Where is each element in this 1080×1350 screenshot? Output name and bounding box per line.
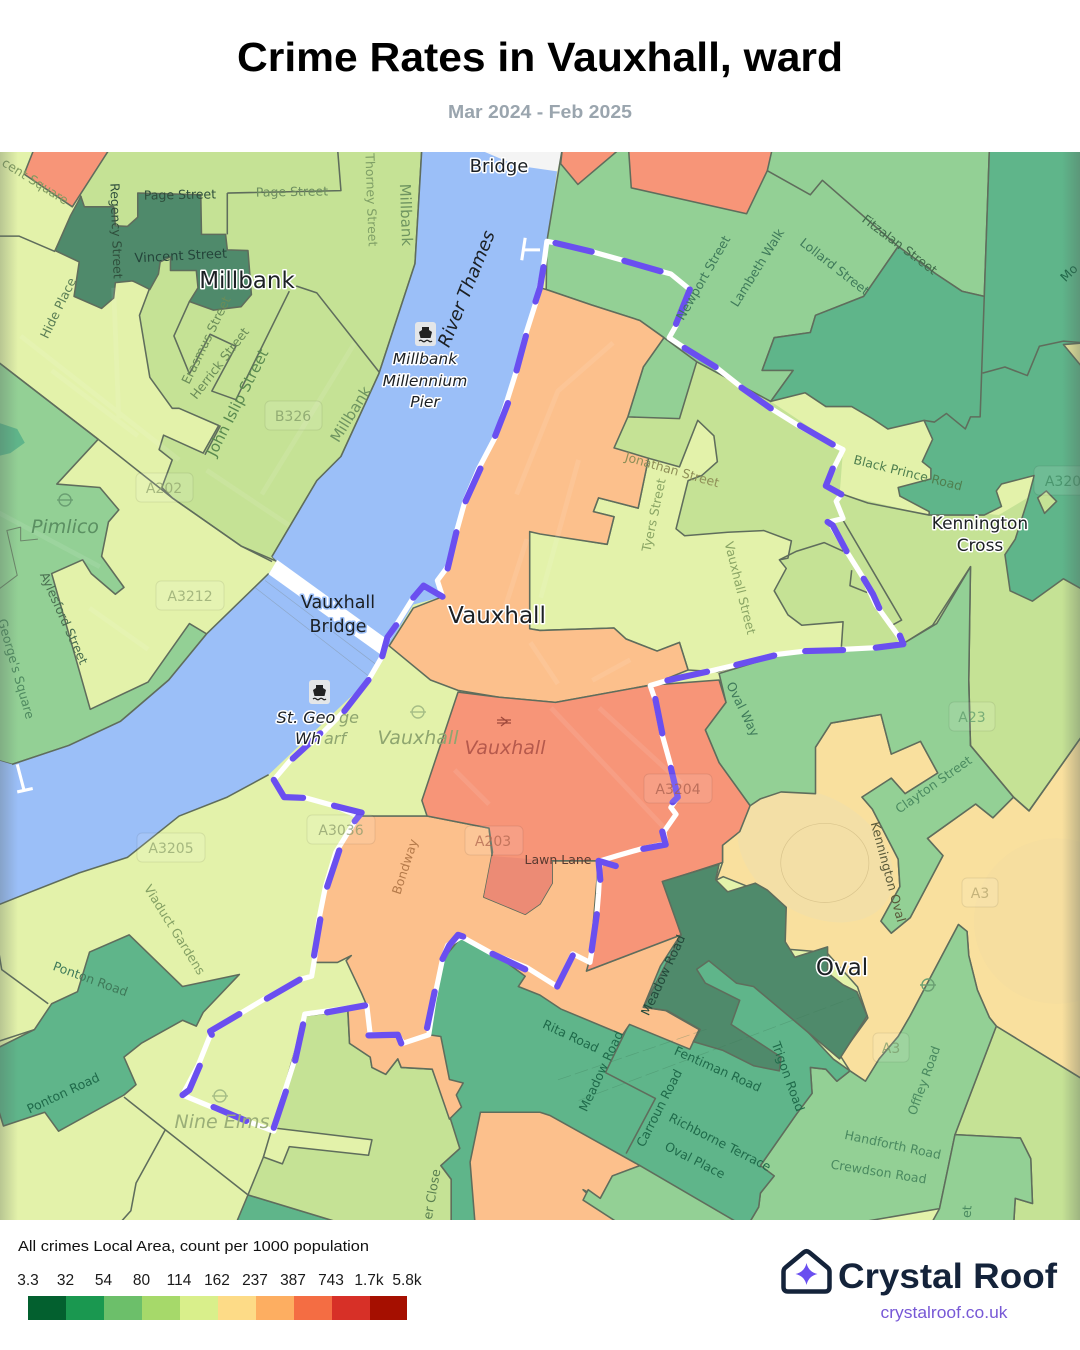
website url: crystalroof.co.uk <box>880 1304 1008 1322</box>
subtitle: date range: Mar 2024 - Feb 2025 <box>448 101 632 122</box>
logo: Crystal Roof <box>784 1251 1057 1322</box>
map zones <box>0 148 1080 1226</box>
zone: small cream patch <box>1062 343 1080 366</box>
ward boundary white casing <box>183 241 903 1131</box>
label: Kennington Cross <box>932 514 1028 556</box>
road sign: A3036 <box>307 815 375 844</box>
icon: house with star <box>784 1251 830 1292</box>
label: Vauxhall Bridge: Vauxhall <box>301 593 375 613</box>
label: Jonathan Street: Jonathan Street <box>622 449 721 490</box>
label: Tyers Street: Tyers Street <box>638 477 669 554</box>
label: Millbank district: Millbank <box>199 268 295 294</box>
map background: base crime band <box>0 152 1080 1220</box>
zone: Lambeth top salmon large <box>629 148 772 214</box>
zone: lower left green <box>583 1166 744 1226</box>
Kia Oval pitch ellipse <box>738 792 786 906</box>
west boundaries <box>0 939 248 1226</box>
label: Black Prince Road: Black Prince Road <box>852 452 964 493</box>
icon: tube Vauxhall <box>410 706 426 718</box>
road sign: A203: A203 <box>475 834 511 850</box>
road sign: A203 <box>465 826 523 855</box>
label: Close: er Close <box>420 1168 443 1221</box>
zone: Nine Elms yellow strip <box>263 1128 372 1164</box>
label: Offley Road: Offley Road <box>904 1044 943 1117</box>
road sign: B326: B326 <box>275 409 311 425</box>
legend colour bar <box>28 1296 407 1320</box>
road sign: A320 <box>1034 466 1080 495</box>
zone: small light green patch <box>1038 491 1057 513</box>
icon: tube Pimlico <box>57 494 73 506</box>
legend scale labels: 5.8k <box>392 1272 422 1289</box>
area labels <box>31 516 546 1133</box>
zone: dark salmon pocket <box>484 856 552 914</box>
label: Crewdson Road: Crewdson Road <box>830 1157 928 1187</box>
label: Vincent Square: cent Square <box>0 155 72 208</box>
zone: Vauxhall north orange <box>389 288 688 702</box>
zone: Pimlico teal blob <box>0 422 25 457</box>
zone: Vauxhall south teal <box>431 940 850 1220</box>
zone: west teal, Ponton Road <box>0 935 239 1131</box>
label: John Islip Street: John Islip Street <box>202 346 272 460</box>
panel: choropleth map <box>0 148 1080 1226</box>
legend scale labels: 32 <box>57 1272 74 1289</box>
label: Handforth Road: Handforth Road <box>843 1127 943 1162</box>
zone: Bondway orange <box>313 816 699 1119</box>
road sign: A3205: A3205 <box>148 841 194 857</box>
label: Millbank south: Millbank <box>327 383 375 446</box>
road sign: A3212: A3212 <box>167 589 213 605</box>
label: Vauxhall Bridge: Bridge <box>309 617 367 637</box>
legend scale labels <box>17 1272 422 1289</box>
legend scale labels: 387 <box>280 1272 306 1289</box>
label: Vauxhall Bridge <box>301 593 375 637</box>
road sign: A23: A23 <box>958 710 986 726</box>
park circle east <box>974 838 1080 1004</box>
Kennington inner boundary <box>924 296 1080 429</box>
zone: central light green <box>615 363 928 647</box>
bridge: Lambeth <box>485 152 561 172</box>
inner boundaries east <box>779 494 970 680</box>
label: Trigon Road: Trigon Road <box>768 1039 808 1113</box>
salmon street texture <box>455 708 682 832</box>
legend scale labels: 1.7k <box>354 1272 384 1289</box>
icon: ferry Millbank <box>415 322 436 346</box>
pier: west end <box>17 764 33 792</box>
road sign: A3 east: A3 <box>971 886 989 902</box>
label: River Thames: River Thames <box>434 228 500 350</box>
zone: Millbank dark green <box>55 193 251 310</box>
legend scale labels: 114 <box>167 1272 192 1289</box>
label: St George Wharf pier: St. Geo <box>277 708 336 727</box>
label: Erasmus Street: Erasmus Street <box>178 294 234 386</box>
road sign: A3212 <box>156 581 224 610</box>
bridge: Vauxhall <box>269 560 389 655</box>
label: Wharf grey part: arf <box>324 729 348 748</box>
zone: Pimlico green <box>0 361 207 764</box>
label: Fitzalan Street: Fitzalan Street <box>859 211 940 278</box>
legend scale labels: 743 <box>318 1272 344 1289</box>
legend scale labels: 54 <box>95 1272 112 1289</box>
legend scale labels: 237 <box>242 1272 268 1289</box>
Oval inner ring <box>781 823 869 902</box>
label: Ponton Road lower: Ponton Road <box>24 1070 102 1116</box>
label: Viaduct Gardens: Viaduct Gardens <box>141 882 209 977</box>
label: Thorney Street: Thorney Street <box>362 152 381 247</box>
street labels <box>0 152 1080 1221</box>
label: Bridge top: Bridge <box>470 156 528 177</box>
label: Millbank Millennium Pier: Millbank <box>393 350 458 368</box>
label: Vincent Street: Vincent Street <box>134 247 227 266</box>
minor streets west <box>12 288 356 568</box>
label: street south edge: et <box>958 1205 975 1219</box>
label: Lollard Street: Lollard Street <box>797 235 872 298</box>
zone: Vauxhall station salmon <box>422 680 750 971</box>
label: Kennington Oval: Kennington Oval <box>868 820 909 924</box>
road sign: A3204 <box>644 774 712 803</box>
pier: Millbank <box>522 238 540 260</box>
label: Ponton Road upper: Ponton Road <box>51 958 130 999</box>
zone: Nine Elms light green <box>248 1011 460 1226</box>
label: Aylesford Street: Aylesford Street <box>37 570 91 667</box>
panel: legend <box>17 1239 422 1320</box>
label: Kennington Cross: Kennington <box>932 514 1028 534</box>
bridge rail lines <box>255 580 379 679</box>
label: St George Wharf pier: Wh <box>295 729 321 748</box>
zone: Lambeth green <box>546 148 989 419</box>
Pimlico inner boundary <box>0 527 38 591</box>
road sign: B326 <box>265 401 322 430</box>
title: Crime Rates in Vauxhall, ward <box>237 34 843 80</box>
ward boundary purple dashes <box>183 243 903 1128</box>
wordmark: Crystal Roof <box>838 1257 1057 1296</box>
zone: Millbank light green <box>37 148 422 562</box>
label: St George Wharf pier <box>277 708 336 748</box>
label: Nine Elms: Nine Elms <box>175 1111 270 1133</box>
label: Millbank Millennium Pier <box>383 350 467 411</box>
map edge shading right <box>1062 152 1080 1220</box>
label: Pimlico: Pimlico <box>31 516 99 538</box>
label: Meadow Road south: Meadow Road <box>576 1028 626 1114</box>
road sign: A3 east <box>962 878 998 907</box>
legend title: All crimes Local Area, count per 1000 population <box>18 1239 369 1255</box>
road sign: A3036: A3036 <box>318 823 364 839</box>
label: Millbank Millennium Pier: Pier <box>410 393 441 411</box>
label: Rita Road: Rita Road <box>541 1016 601 1055</box>
zone: Lambeth top salmon small <box>560 152 618 186</box>
label: Newport Street: Newport Street <box>673 233 733 323</box>
label: Clayton Street: Clayton Street <box>892 752 975 816</box>
road sign: A23 <box>949 702 995 731</box>
orange rail texture <box>499 343 630 684</box>
road sign: A202 <box>136 473 193 502</box>
label: Regency Street: Regency Street <box>107 183 126 279</box>
zone: SE green <box>747 925 996 1226</box>
zone: Oval dark green <box>643 864 867 1071</box>
map edge shading left <box>0 152 18 1220</box>
legend scale labels: 3.3 <box>17 1272 39 1289</box>
icon: ferry St George Wharf <box>309 680 330 704</box>
label: Page Street east: Page Street <box>256 183 328 200</box>
Lambeth inner boundary <box>664 171 898 362</box>
icon: rail station <box>497 717 511 726</box>
label: St George Wharf grey part: ge <box>339 708 359 727</box>
label: Herrick Street: Herrick Street <box>187 324 252 402</box>
zone: SE green square <box>930 1135 1032 1226</box>
road sign: A3 south <box>873 1033 909 1062</box>
teal streets <box>558 997 854 1101</box>
zone: SE light green <box>955 1026 1080 1226</box>
label: Millbank Millennium Pier: Millennium <box>383 372 467 390</box>
Millbank inner boundaries <box>0 148 381 562</box>
label: Richborne Terrace: Richborne Terrace <box>667 1110 774 1174</box>
label: Vauxhall station italic red: Vauxhall <box>465 737 546 759</box>
label: Page Street west: Page Street <box>144 186 216 203</box>
label: Oval Place: Oval Place <box>662 1138 728 1182</box>
label: Lawn Lane: Lawn Lane <box>525 852 592 867</box>
legend scale labels: 162 <box>204 1272 230 1289</box>
label: Vauxhall Street: Vauxhall Street <box>722 540 759 636</box>
zone: Oval cream <box>716 714 1080 1081</box>
zone: top-left salmon <box>24 148 110 207</box>
label: Fentiman Road: Fentiman Road <box>672 1043 764 1095</box>
teal inner boundary <box>605 1024 655 1154</box>
label: Lambeth Walk: Lambeth Walk <box>727 225 788 309</box>
road sign: A3204: A3204 <box>655 782 701 798</box>
label: Hide Place: Hide Place <box>37 275 79 341</box>
label: Vauxhall district: Vauxhall <box>448 603 546 629</box>
label: Bondway: Bondway <box>389 836 421 896</box>
legend scale labels: 80 <box>133 1272 150 1289</box>
road sign: A202: A202 <box>146 481 182 497</box>
label: Mo(ntford): Mo <box>1057 261 1080 285</box>
zone: Kennington teal <box>762 148 1080 601</box>
road sign: A3 south: A3 <box>882 1041 900 1057</box>
zone: bottom teal sliver <box>235 1195 351 1226</box>
label: Carroun Road: Carroun Road <box>633 1067 685 1149</box>
label: Millbank north: Millbank <box>396 183 416 247</box>
zone: east light green <box>970 498 1080 810</box>
zone: Oval Way green <box>705 567 1014 933</box>
label: Vauxhall station italic green: Vauxhall <box>378 727 459 749</box>
label: Kennington Cross: Cross <box>957 536 1003 556</box>
icon: tube Oval <box>920 979 936 991</box>
zone: cream NE divider <box>969 680 1080 811</box>
icon: tube Nine Elms <box>212 1090 228 1102</box>
river Thames <box>0 148 562 906</box>
road sign: A3205 <box>137 833 205 862</box>
zone: Vauxhall yellow-green <box>530 420 843 672</box>
river bank outline <box>0 148 422 906</box>
label: Oval Way: Oval Way <box>723 679 763 739</box>
place labels with halo <box>199 156 1028 981</box>
label: Oval: Oval <box>816 955 868 981</box>
label: Meadow Road north: Meadow Road <box>638 932 688 1018</box>
zone: south orange <box>470 1112 640 1226</box>
